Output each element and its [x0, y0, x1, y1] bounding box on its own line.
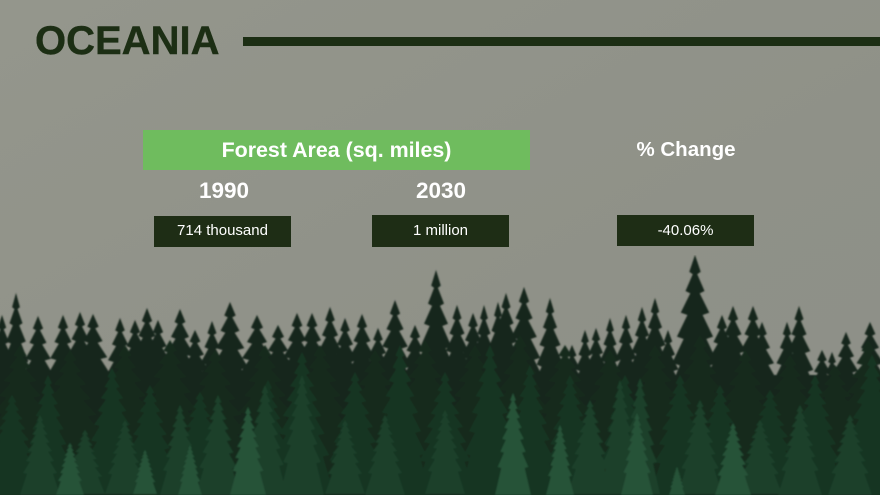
year label 1990: 1990 — [199, 178, 249, 203]
value: 1990 forest area: 714 thousand — [177, 222, 268, 239]
value: 2030 forest area — [372, 215, 509, 247]
header: percent change: % Change — [636, 138, 736, 161]
middle row — [0, 345, 880, 495]
header: forest area: Forest Area (sq. miles) — [222, 138, 451, 162]
upper mid row — [0, 335, 880, 495]
year label 2030: 2030 — [416, 178, 466, 203]
header: forest area — [143, 130, 530, 170]
value: 2030 forest area: 1 million — [413, 222, 468, 239]
value: 1990 forest area — [154, 216, 291, 247]
front lighter trees — [56, 393, 751, 495]
lower row — [20, 375, 872, 495]
back row tree tops — [0, 255, 880, 495]
value: percent change — [617, 215, 754, 246]
title rule — [243, 37, 880, 46]
title: OCEANIA — [35, 19, 219, 63]
value: percent change: -40.06% — [658, 222, 713, 239]
